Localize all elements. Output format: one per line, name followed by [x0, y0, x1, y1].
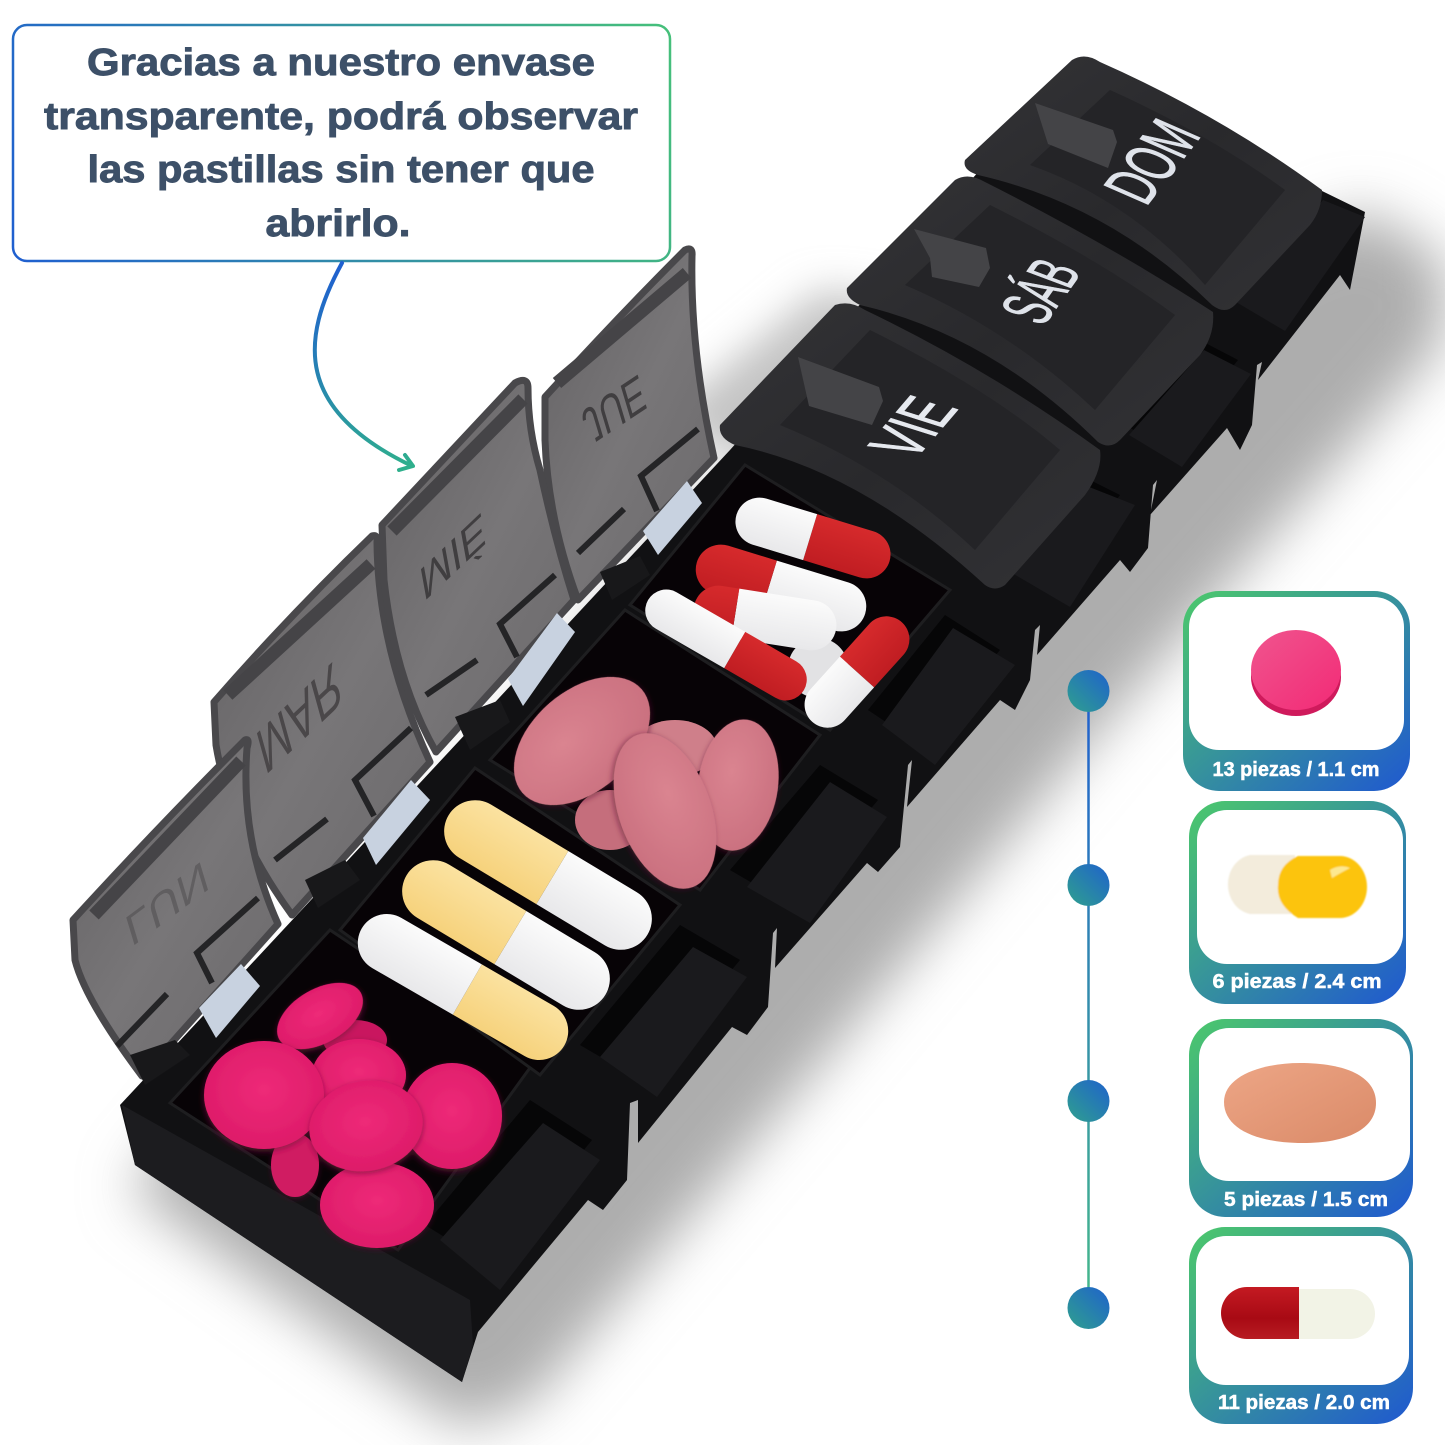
card: 13 piezas: 13 piezas / 1.1 cm: [1212, 759, 1380, 781]
closed lid: DOM: DOM: [1088, 110, 1216, 213]
callout text: las pastillas sin tener que: [88, 149, 594, 191]
callout text: Gracias a nuestro envase: [87, 42, 595, 84]
closed lid: DOM: [965, 56, 1322, 310]
card: 11 piezas: 11 piezas / 2.0 cm: [1218, 1392, 1390, 1414]
card: 6 piezas: 6 piezas / 2.4 cm: [1212, 971, 1382, 993]
closed lid: VIE: [720, 303, 1100, 588]
pills: magenta tablets: [204, 969, 502, 1248]
open lid: MAR: MAR: [251, 648, 348, 789]
body silhouette: [120, 170, 1365, 1382]
callout text: abrirlo.: [266, 203, 410, 245]
closed lid: VIE: VIE: [854, 389, 974, 466]
card: 13 piezas: [1183, 591, 1410, 791]
pill box body: [120, 170, 1365, 1382]
pills: red and white capsules: [638, 492, 919, 737]
icon: orange oval tablet: [1224, 1063, 1376, 1143]
timeline dots: [1068, 670, 1110, 1329]
side clip tabs: [425, 195, 1365, 1290]
closed lid: SÁB: [847, 176, 1213, 446]
pills: yellow and white capsules: [347, 789, 663, 1071]
open lid: JUE: [545, 249, 714, 600]
pills: mauve oval tablets: [490, 651, 787, 903]
tab recesses: [425, 195, 1350, 1265]
timeline: [1068, 670, 1110, 1329]
open lid: JUE: JUE: [577, 363, 652, 455]
open lid: MAR: [214, 536, 430, 915]
compartments: [170, 465, 950, 1250]
open lid: MIE: MIÉ: [416, 502, 489, 612]
icon: yellow capsule: [1228, 855, 1367, 918]
callout text: transparente, podrá observar: [44, 96, 638, 138]
closed lid: SÁB: SÁB: [986, 250, 1096, 332]
card: 11 piezas: [1189, 1227, 1413, 1424]
arrow from callout to lid: [315, 263, 413, 470]
card: 5 piezas: 5 piezas / 1.5 cm: [1224, 1189, 1388, 1211]
icon: red capsule: [1221, 1287, 1375, 1339]
card: 5 piezas: [1189, 1019, 1413, 1217]
open lid: LUN: [73, 740, 278, 1085]
tab faces: [440, 200, 1365, 1290]
callout text: [44, 42, 638, 245]
drop shadow of the pill box: [130, 210, 1445, 1428]
card: 6 piezas: [1189, 801, 1406, 1004]
icon: pink tablet: [1251, 630, 1341, 716]
front face: [122, 1105, 473, 1382]
callout box: [13, 25, 670, 261]
open lid: MIE: [382, 380, 575, 752]
open lid: LUN: LUN: [120, 851, 214, 956]
